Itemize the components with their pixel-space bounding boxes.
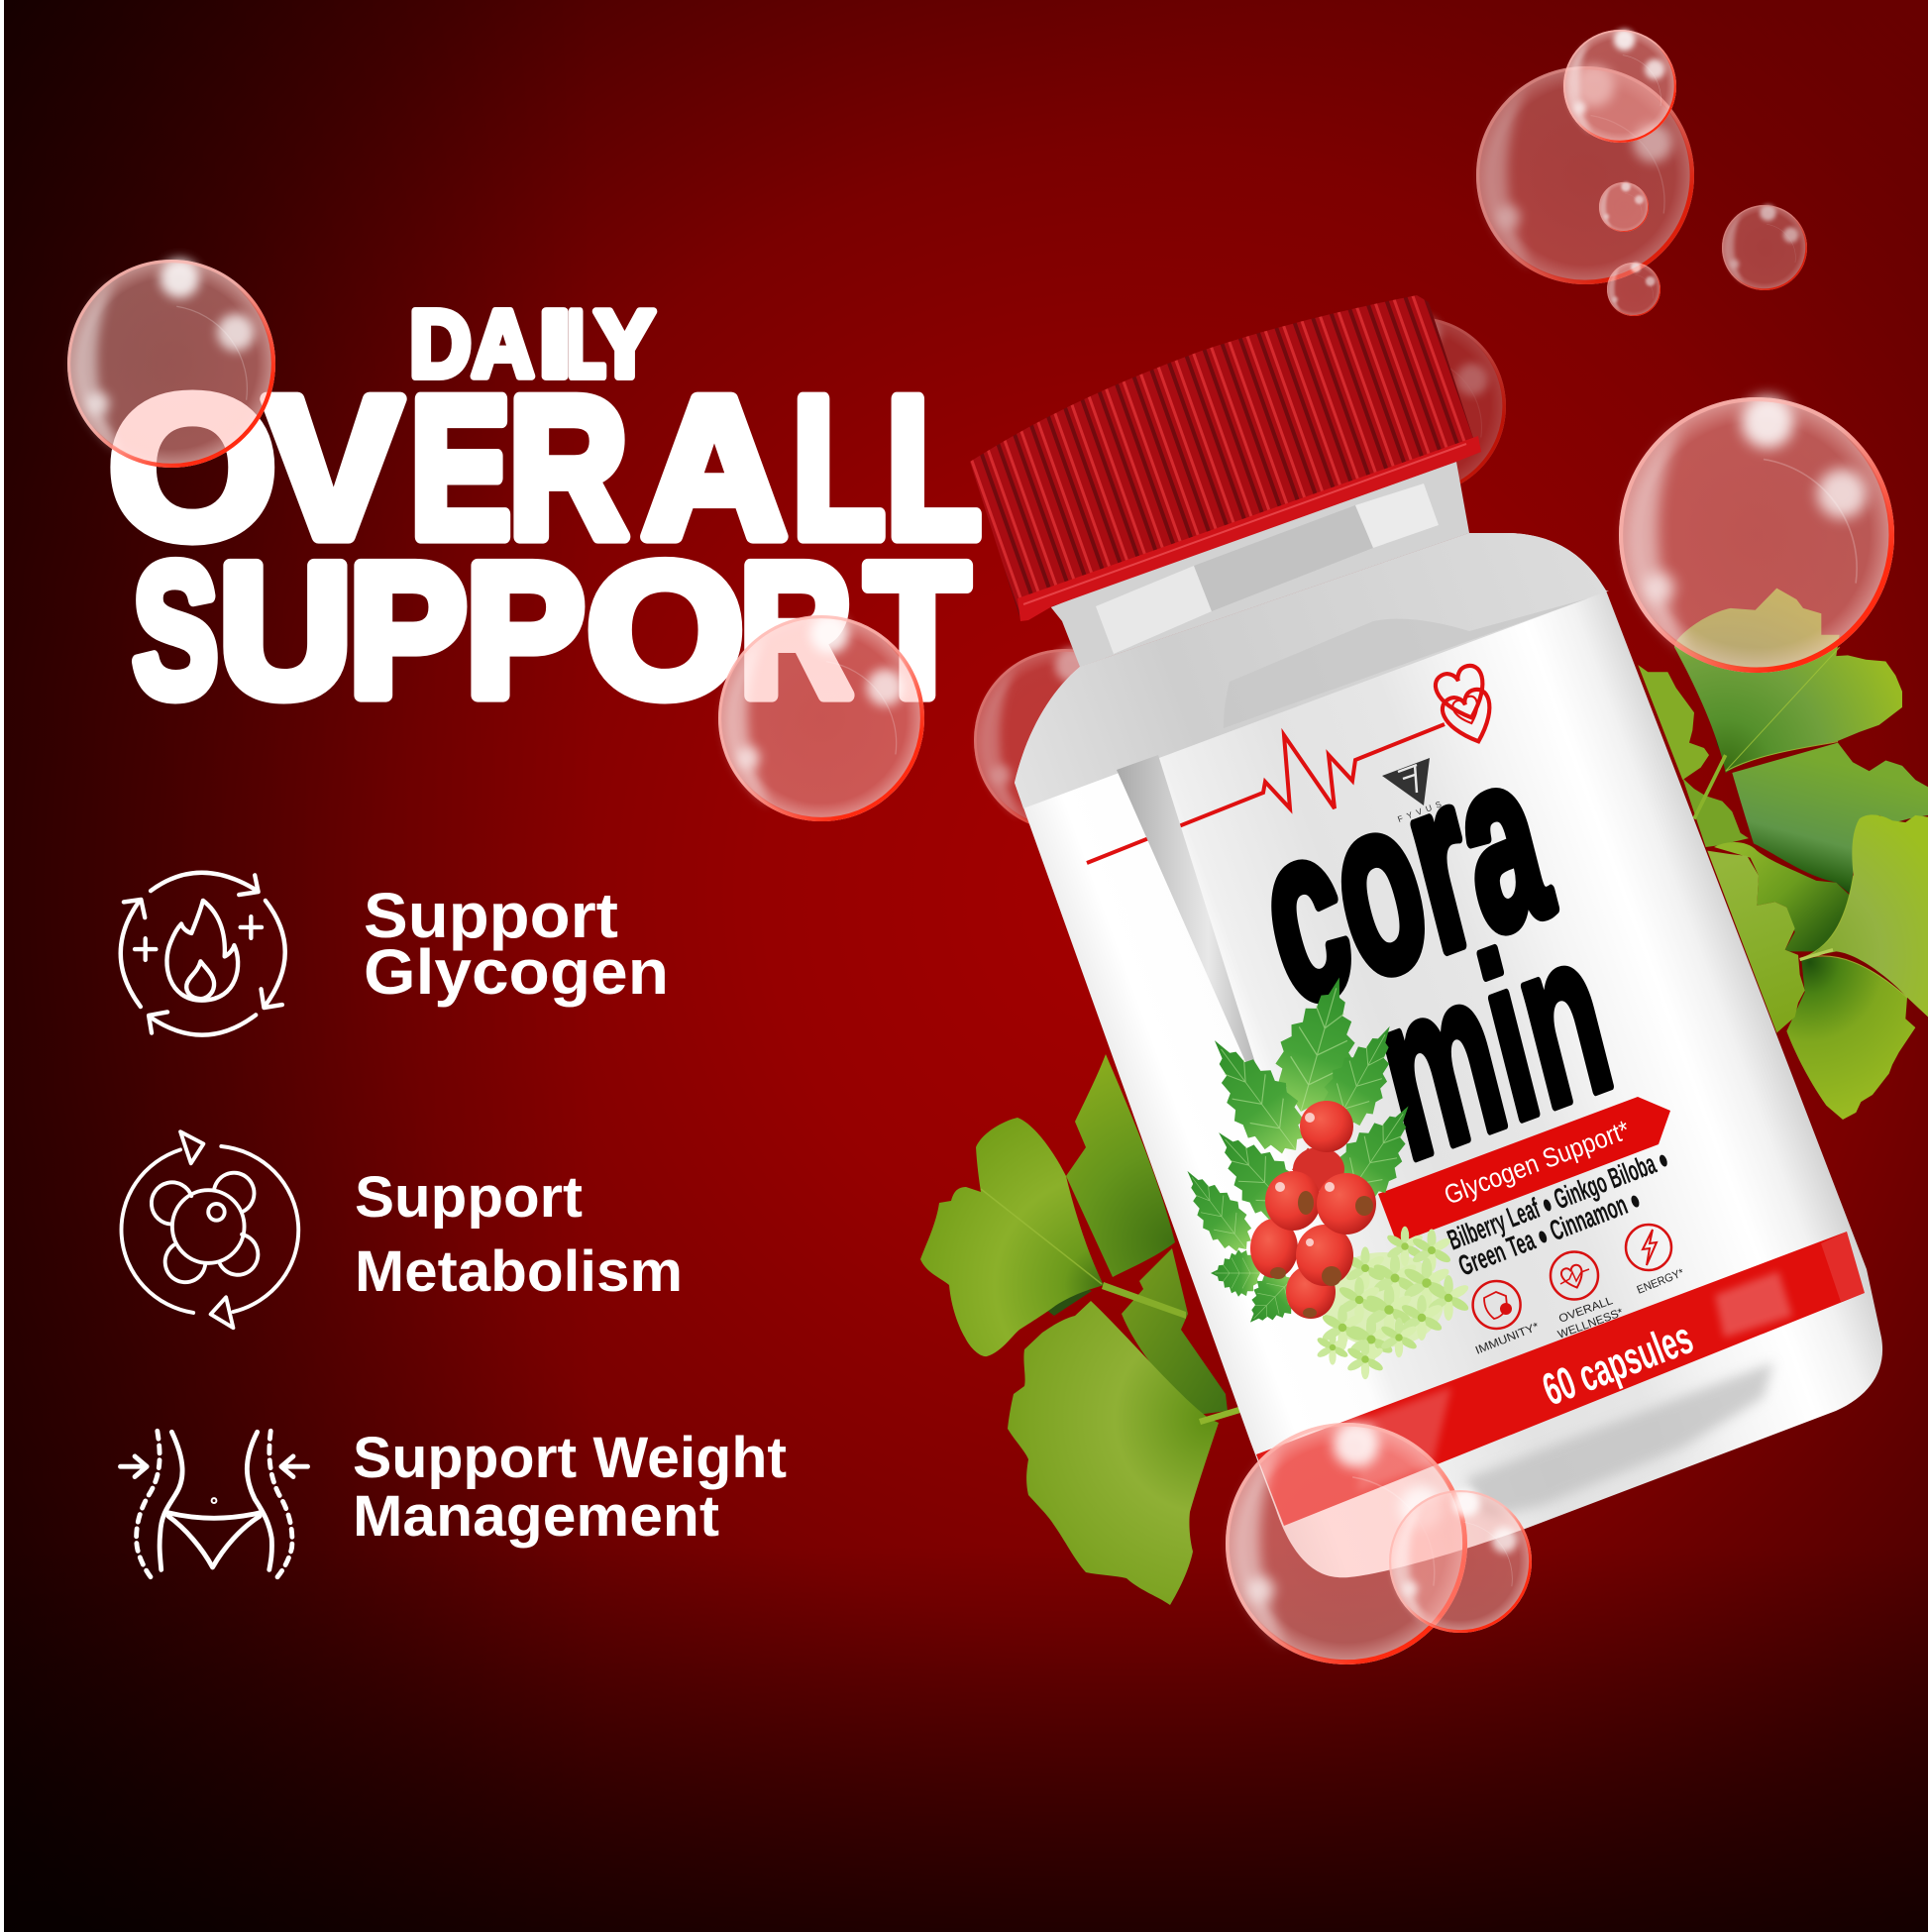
- text: Support Weight Management: Support Weight: [353, 1426, 787, 1490]
- benefit: overall wellness: WELLNESS*: [1556, 1307, 1625, 1342]
- product name: cora min: min: [1354, 878, 1631, 1210]
- text: Support Glycogen: Glycogen: [364, 936, 669, 1008]
- heartbeat line: [1087, 724, 1445, 863]
- bubble: tiny lower: [1607, 263, 1660, 316]
- red banner: [1378, 1097, 1670, 1243]
- leaves: [1170, 967, 1434, 1339]
- hawthorn berries: [1250, 1101, 1376, 1319]
- brand logo: [1382, 758, 1446, 824]
- title: Daily Overall Support: R: [739, 526, 852, 736]
- bubble: bottom small: [1389, 1489, 1532, 1633]
- text: Support Metabolism: [355, 1165, 683, 1304]
- title: Daily Overall Support: R: [508, 356, 628, 580]
- brand logo: FYVUS: [1396, 798, 1446, 824]
- ginkgo leaves: left: [920, 1054, 1240, 1605]
- title: Daily Overall Support: I: [539, 291, 572, 397]
- text: Support Glycogen: [364, 880, 669, 1008]
- title: Daily Overall Support: O: [109, 356, 276, 580]
- bottle cap: [970, 295, 1481, 621]
- bubble: tiny inner: [1599, 182, 1649, 232]
- title: Daily Overall Support: L: [886, 356, 981, 580]
- title: Daily Overall Support: U: [219, 526, 352, 736]
- text: Support Metabolism: Metabolism: [355, 1239, 683, 1304]
- benefit: immunity: IMMUNITY*: [1474, 1321, 1542, 1357]
- feature: support glycogen: [121, 873, 669, 1035]
- hawthorn illustration: [1170, 967, 1470, 1379]
- icon: cell in cycle arrows: [122, 1131, 298, 1328]
- feature: support weight management: [121, 1426, 787, 1577]
- bubble: bottom big: [1226, 1422, 1467, 1664]
- title: Daily Overall Support: S: [133, 526, 218, 736]
- title: Daily Overall Support: D: [409, 291, 472, 397]
- text: Support Weight Management: [353, 1426, 787, 1549]
- bubble: top right small: [1563, 29, 1676, 143]
- benefit: immunity: [1473, 1281, 1542, 1357]
- title: Daily Overall Support: P: [349, 526, 467, 736]
- feature: support metabolism: [122, 1131, 683, 1328]
- ingredient list: Bilberry Leaf ● Ginkgo Biloba ●: [1444, 1143, 1673, 1257]
- title: Daily Overall Support: O: [588, 526, 743, 736]
- title: Daily Overall Support: [109, 291, 981, 736]
- title: Daily Overall Support: V: [266, 356, 401, 580]
- bubble: over title O: [67, 259, 275, 468]
- bubble: over title R: [718, 614, 924, 821]
- icon: waist with arrows: [121, 1431, 308, 1577]
- bottle neck: [1050, 462, 1469, 667]
- title: Daily Overall Support: Y: [594, 291, 655, 397]
- product name: cora min: cora: [1236, 697, 1570, 1058]
- banner text: Glycogen Support*: [1441, 1115, 1634, 1211]
- benefit: overall wellness: OVERALL: [1557, 1295, 1615, 1326]
- bubble: right small: [1722, 205, 1807, 290]
- white flower cluster: [1316, 1227, 1470, 1379]
- bubbles behind bottle: [974, 316, 1506, 831]
- icon: hearts: [1432, 663, 1501, 749]
- benefit: overall wellness: [1551, 1252, 1625, 1342]
- ingredient list: [1444, 1143, 1673, 1283]
- title: Daily Overall Support: A: [642, 356, 787, 580]
- text: Support Weight Management: Management: [353, 1484, 719, 1549]
- silver label stripe: [1117, 755, 1283, 1139]
- product name: cora min: [1236, 697, 1631, 1210]
- capsule count: 60 capsules: [1536, 1312, 1699, 1415]
- icon: flame in cycle arrows: [121, 873, 285, 1035]
- bubble: top right large: [1476, 65, 1694, 284]
- title: Daily Overall Support: T: [866, 526, 969, 736]
- benefit: energy: [1626, 1225, 1686, 1297]
- title: Daily Overall Support: E: [410, 356, 511, 580]
- red capsule band: [1256, 1232, 1865, 1526]
- bubble: large right: [1619, 396, 1894, 673]
- text: Support Glycogen: Support: [364, 880, 618, 951]
- bottle shoulder: [1015, 533, 1609, 808]
- bottle body: [1015, 533, 1882, 1577]
- title: Daily Overall Support: A: [472, 291, 534, 397]
- ginkgo leaves: right: [1638, 589, 1928, 1120]
- title: Daily Overall Support: L: [793, 356, 885, 580]
- product bottle: [970, 295, 1882, 1577]
- stem: [1294, 1149, 1310, 1171]
- title: Daily Overall Support: P: [466, 526, 585, 736]
- title: Daily Overall Support: L: [567, 291, 606, 397]
- ingredient list: Green Tea ● Cinnamon ●: [1454, 1184, 1646, 1283]
- shoulder shadow: [1224, 598, 1588, 728]
- benefit: energy: ENERGY*: [1636, 1267, 1686, 1297]
- lower bottle shading: [1466, 1362, 1773, 1518]
- text: Support Metabolism: Support: [355, 1165, 583, 1230]
